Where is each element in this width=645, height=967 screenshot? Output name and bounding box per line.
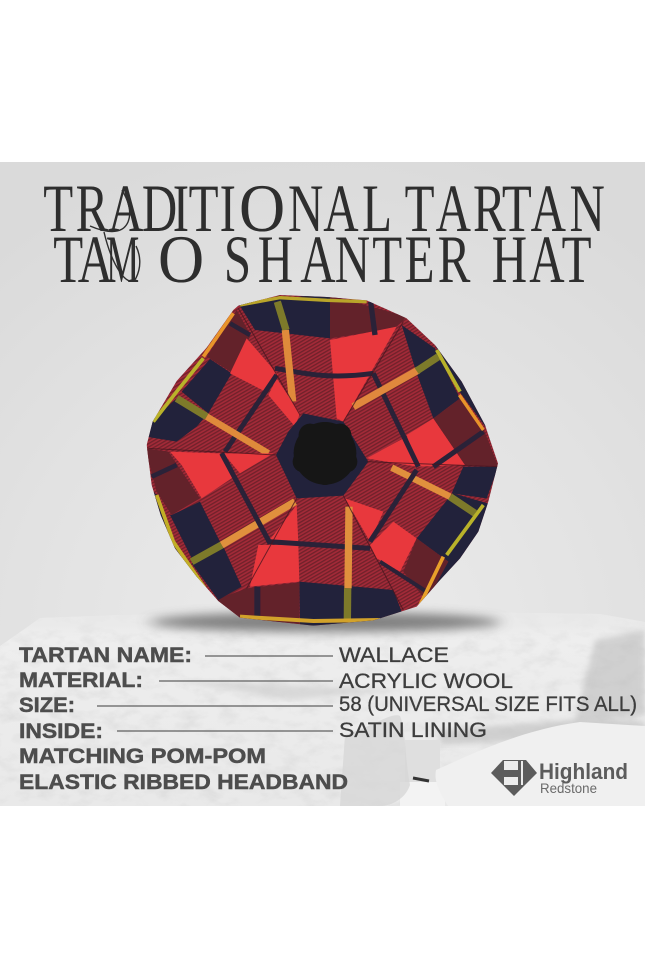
leader lines xyxy=(97,656,333,731)
title: SHANTER HAT xyxy=(224,221,592,297)
hat shadow xyxy=(150,612,500,632)
logo: Highland Redstone: Highland xyxy=(539,759,628,784)
lower right panel xyxy=(345,467,498,605)
title: O xyxy=(158,222,204,297)
background panel xyxy=(0,162,645,806)
logo mark xyxy=(491,760,537,796)
navy crown hexagon xyxy=(276,413,368,498)
title swashes xyxy=(90,190,140,281)
spec values: WALLACE xyxy=(339,644,449,667)
infographic canvas xyxy=(0,162,645,806)
spec values: 58 (UNIVERSAL SIZE FITS ALL) xyxy=(339,693,637,716)
panel seams xyxy=(148,308,497,610)
spec values: ACRYLIC WOOL xyxy=(339,670,513,693)
title: TRADITI xyxy=(43,170,236,246)
stone plinth xyxy=(0,610,645,806)
spec labels: ELASTIC RIBBED HEADBAND xyxy=(19,771,348,794)
bottom panel xyxy=(215,505,402,627)
title: NAL TARTAN xyxy=(288,170,605,246)
upper left panel xyxy=(146,310,300,453)
spec labels: TARTAN NAME: xyxy=(19,644,192,667)
title: TA xyxy=(53,221,113,297)
spec labels: MATERIAL: xyxy=(19,669,143,692)
spec labels: INSIDE: xyxy=(19,720,103,743)
hat: tartan tam o shanter xyxy=(140,285,505,630)
title: O xyxy=(239,171,285,246)
lower left panel xyxy=(145,448,295,602)
spec labels: SIZE: xyxy=(19,694,75,717)
logo: Highland Redstone: Redstone xyxy=(540,780,597,796)
spec labels xyxy=(19,644,348,794)
title: M xyxy=(106,221,139,297)
title xyxy=(43,170,605,297)
spec values: SATIN LINING xyxy=(339,719,487,742)
spec values xyxy=(339,644,637,742)
spec labels: MATCHING POM-POM xyxy=(19,745,266,768)
top panel xyxy=(238,293,407,422)
logo: Highland Redstone xyxy=(491,759,628,796)
upper right panel xyxy=(353,325,498,467)
pom-pom xyxy=(293,422,357,485)
